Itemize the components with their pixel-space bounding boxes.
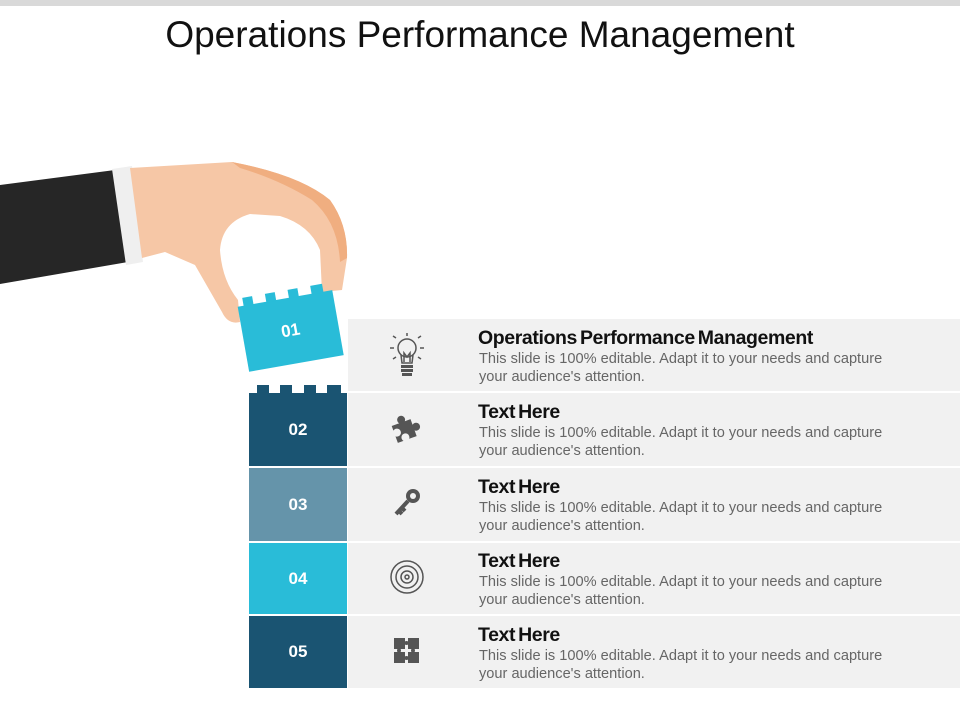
text [479,648,882,682]
block 04 [249,543,347,614]
text [479,574,882,608]
row 5 [348,616,960,688]
top bar [0,0,960,6]
text: your audience's attention. [479,518,645,534]
text: This slide is 100% editable. Adapt it to your needs and capture [479,500,882,516]
heading: Text Here [478,624,560,646]
row 3 [348,468,960,541]
heading: Text Here [478,550,560,572]
block 05: 05 [289,642,307,661]
block 02: 02 [289,420,307,438]
block 02 [249,393,347,466]
text: your audience's attention. [479,369,645,385]
text: your audience's attention. [479,443,645,459]
icon: puzzle piece [392,416,420,443]
text [479,425,882,459]
block 01 (tilted): 01 [280,319,302,341]
block 04: 04 [289,568,307,588]
block 05 [249,616,347,688]
text: This slide is 100% editable. Adapt it to your needs and capture [479,351,882,367]
block 03: 03 [289,494,307,514]
cuff [112,166,143,265]
text: This slide is 100% editable. Adapt it to your needs and capture [479,574,882,590]
sleeve [0,170,128,284]
row 4 [348,543,960,614]
icon: key [394,489,420,516]
text [479,351,882,385]
heading: Text Here [478,476,560,498]
text: This slide is 100% editable. Adapt it to your needs and capture [479,425,882,441]
icon: maze [390,560,424,594]
row 2 [348,393,960,466]
text [479,500,882,534]
title: Operations Performance Management [165,14,795,55]
text: your audience's attention. [479,592,645,608]
heading: Text Here [478,401,560,423]
hand illustration [0,162,348,323]
text: your audience's attention. [479,666,645,682]
heading: Operations Performance Management [478,327,813,349]
icon: lightbulb [390,333,424,376]
row 1 [348,319,960,391]
hand [130,162,347,323]
studs on block 02 [257,385,341,393]
block 01 (tilted) [238,284,344,372]
icon: puzzle pieces [394,638,419,663]
text: This slide is 100% editable. Adapt it to your needs and capture [479,648,882,664]
block 03 [249,468,347,541]
